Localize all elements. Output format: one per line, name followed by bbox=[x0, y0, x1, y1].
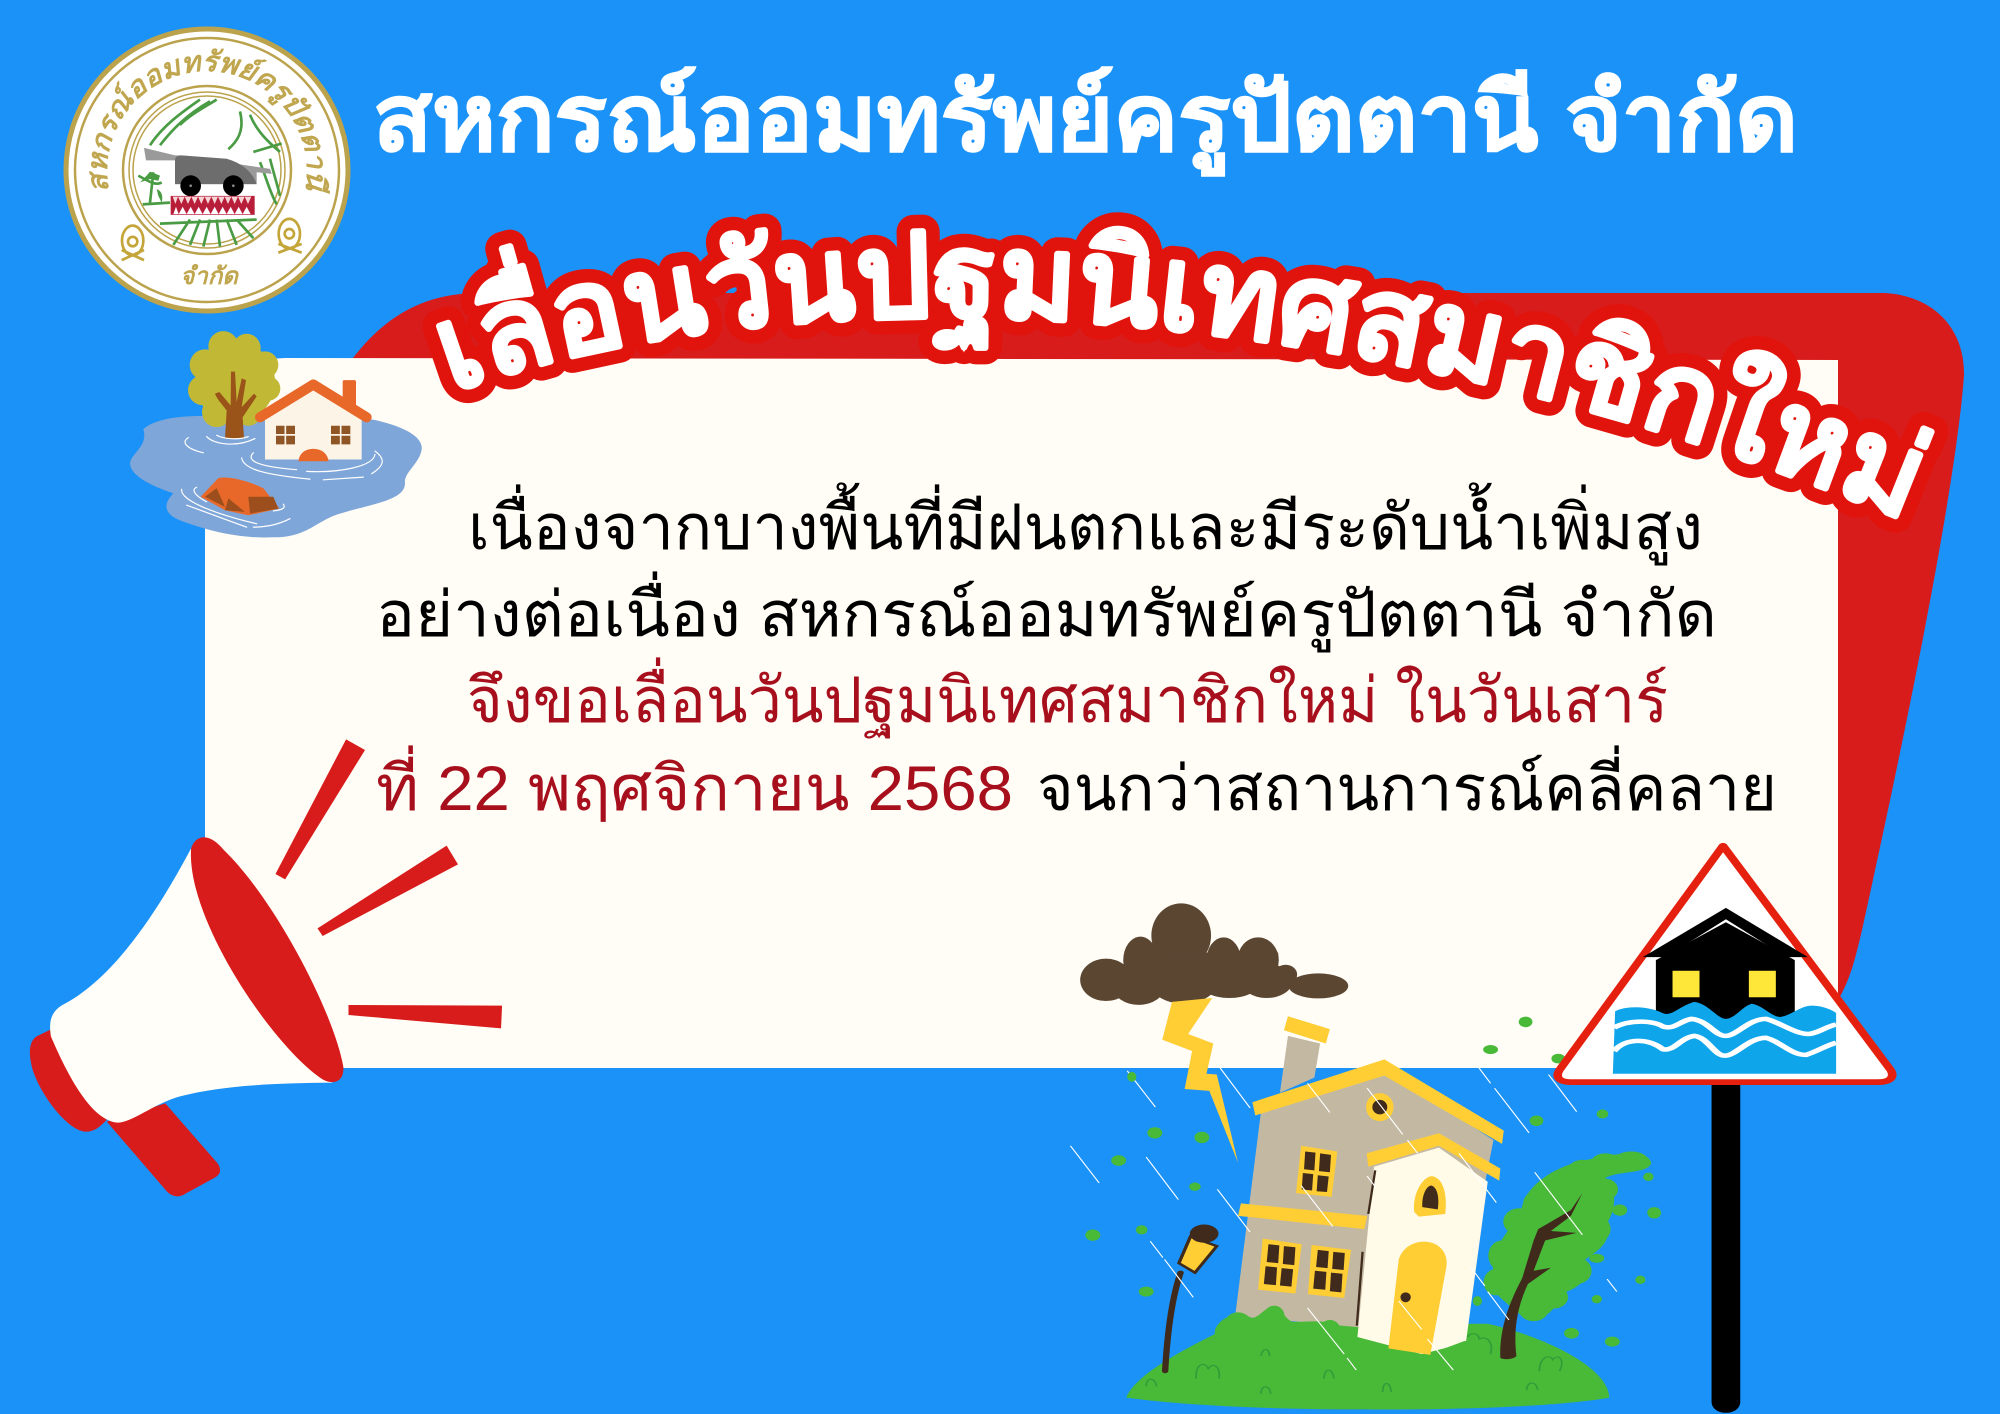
house roof bbox=[1252, 1059, 1504, 1144]
water ripples bbox=[182, 435, 382, 527]
panel: cream notice bbox=[205, 358, 1838, 1068]
sign water bbox=[1613, 1002, 1836, 1074]
tree bbox=[188, 331, 280, 439]
wing edge shadow bbox=[1357, 1170, 1375, 1326]
rain bbox=[1070, 1068, 1617, 1370]
line 4 date: ที่ 22 พฤศจิกายน 2568 bbox=[376, 745, 1013, 824]
foreground bushes bbox=[1430, 1341, 1499, 1365]
panel: red backing shape bbox=[350, 293, 1964, 1000]
upper window bbox=[1296, 1146, 1337, 1197]
cloud bbox=[1080, 903, 1348, 1005]
megaphone body bbox=[50, 848, 332, 1123]
line 2: อย่างต่อเนื่อง สหกรณ์ออมทรัพย์ครูปัตตานี จำกัด bbox=[376, 571, 1717, 653]
chimney bbox=[1280, 1016, 1330, 1093]
sign house bbox=[1643, 908, 1808, 1021]
logo: cooperative seal bbox=[64, 26, 350, 314]
ground bbox=[1126, 1324, 1609, 1410]
line 4 remainder: จนกว่าสถานการณ์คลี่คลาย bbox=[1037, 745, 1777, 824]
tree foliage bbox=[1484, 1151, 1651, 1321]
arch window bbox=[1414, 1176, 1446, 1217]
front wing bbox=[1357, 1148, 1488, 1354]
house main bbox=[1235, 1070, 1493, 1329]
megaphone back bbox=[30, 1029, 107, 1132]
sign post bbox=[1712, 1083, 1740, 1413]
icon: megaphone bbox=[30, 739, 502, 1196]
street lamp bbox=[1165, 1225, 1219, 1371]
submerged car bbox=[201, 477, 279, 515]
title: curved banner: เลื่อนวันปฐมนิเทศสมาชิกใหม่ bbox=[436, 226, 1935, 520]
round window bbox=[1366, 1093, 1394, 1121]
logo text: name: สหกรณ์ออมทรัพย์ครูปัตตานี bbox=[89, 48, 330, 194]
body text bbox=[376, 482, 1777, 824]
logo text: limited: จำกัด bbox=[180, 263, 239, 290]
line 1: เนื่องจากบางพื้นที่มีฝนตกและมีระดับน้ำเพิ่มสูง bbox=[468, 482, 1703, 566]
megaphone mouth bbox=[191, 837, 343, 1082]
lower windows bbox=[1258, 1239, 1351, 1298]
illustration: storm house bbox=[1070, 903, 1661, 1410]
line 3: จึงขอเลื่อนวันปฐมนิเทศสมาชิกใหม่ ในวันเสาร์ bbox=[467, 657, 1668, 738]
belt bbox=[1238, 1203, 1367, 1229]
icon: flood warning sign bbox=[1558, 846, 1892, 1413]
flood water bbox=[130, 416, 422, 537]
bushes bbox=[1212, 1306, 1373, 1358]
sound rays bbox=[275, 739, 502, 1028]
megaphone handle bbox=[107, 1103, 220, 1196]
door bbox=[1388, 1242, 1447, 1355]
title: curved banner: เลื่อนวันปฐมนิเทศสมาชิกใหม่ bbox=[422, 212, 1948, 532]
leaves bbox=[1085, 1017, 1661, 1347]
sign triangle bbox=[1558, 846, 1892, 1082]
heading: organisation name: สหกรณ์ออมทรัพย์ครูปัตตานี จำกัด bbox=[373, 66, 1798, 176]
tree trunk bbox=[1500, 1193, 1582, 1359]
grass tufts bbox=[1146, 1334, 1562, 1394]
illustration: flooded house bbox=[130, 331, 422, 537]
lightning bbox=[1162, 998, 1238, 1163]
logo artwork bbox=[122, 100, 302, 260]
house bbox=[260, 380, 367, 461]
